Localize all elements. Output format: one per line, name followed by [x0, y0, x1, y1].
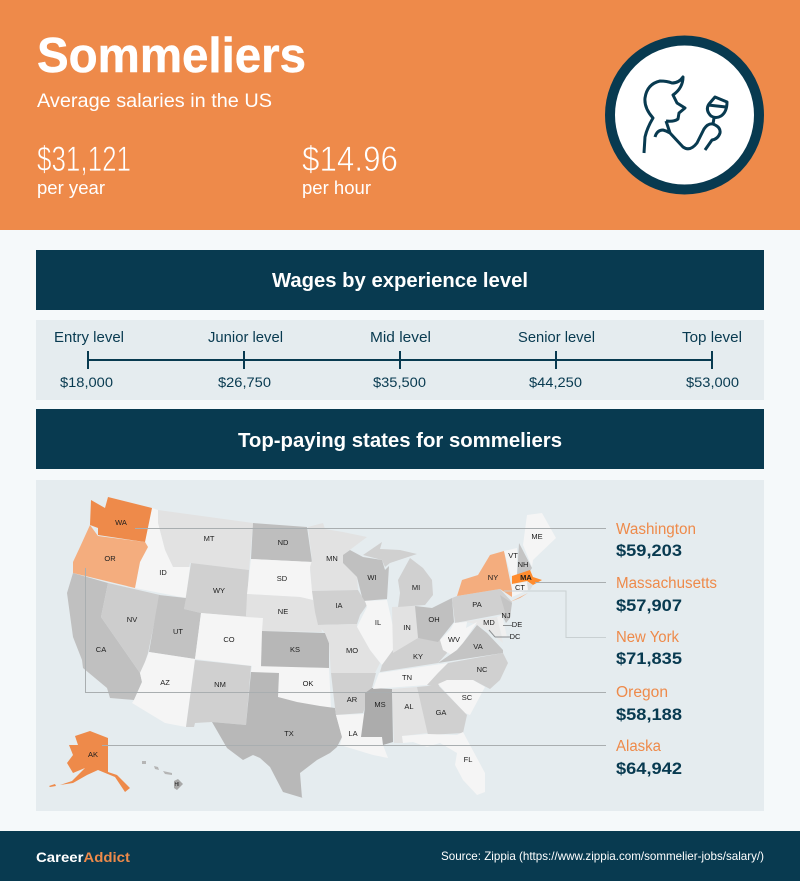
state salary: Oregon [616, 684, 682, 724]
state salary: New York: New York [616, 629, 679, 646]
heading bar: top-paying states [36, 409, 764, 469]
US state map [49, 497, 556, 798]
stat: yearly salary: $31,121 [37, 140, 131, 179]
state abbreviations: VT [508, 551, 518, 560]
state abbreviations: HI [174, 782, 180, 788]
state abbreviations: IN [403, 623, 411, 632]
timeline level labels: Mid level [370, 330, 431, 346]
state abbreviations: GA [436, 708, 446, 717]
state abbreviations: NY [488, 573, 498, 582]
state abbreviations: IL [375, 618, 381, 627]
timeline wage values [60, 375, 739, 390]
state abbreviations: MA [520, 573, 532, 582]
state abbreviations: MT [204, 534, 215, 543]
state salary: Alaska [616, 738, 682, 778]
state abbreviations: CO [223, 635, 235, 644]
state abbreviations: IA [335, 601, 343, 610]
state salary: Alaska: Alaska [616, 738, 661, 755]
state salary: Oregon: Oregon [616, 684, 668, 701]
state abbreviations: SC [462, 693, 473, 702]
state abbreviations: MO [346, 646, 358, 655]
state abbreviations: OH [428, 615, 440, 624]
panel: header [0, 0, 800, 230]
timeline level labels [54, 330, 742, 346]
state abbreviations: NV [127, 615, 137, 624]
state abbreviations: CA [96, 645, 106, 654]
state salary: Massachusetts: $57,907 [616, 597, 682, 615]
state abbreviations: UT [173, 627, 183, 636]
state abbreviations: NM [214, 680, 226, 689]
panel: footer [0, 831, 800, 881]
state salary: Massachusetts: Massachusetts [616, 575, 717, 592]
timeline level labels: Senior level [518, 330, 595, 346]
state abbreviations: WI [367, 573, 377, 582]
heading bar: wages by experience level [36, 250, 764, 310]
state salary: New York [616, 629, 682, 668]
stat: yearly salary [37, 140, 131, 198]
logo: CareerAddict: CareerAddict [36, 849, 130, 865]
state abbreviations: NH [518, 560, 528, 569]
connector lines [86, 528, 606, 746]
state abbreviations: CT [515, 583, 525, 592]
state abbreviations: AR [347, 695, 358, 704]
timeline level labels: Junior level [208, 330, 283, 346]
state salary: Oregon: $58,188 [616, 706, 682, 724]
state abbreviations: WY [213, 586, 225, 595]
state abbreviations: MS [374, 700, 386, 709]
state abbreviations: PA [472, 600, 482, 609]
state abbreviations: AK [88, 750, 98, 759]
heading bar: wages by experience level: Wages by experience level [272, 270, 528, 292]
state abbreviations: MI [412, 583, 420, 592]
state abbreviations: TN [402, 673, 412, 682]
panel: map of top-paying states [36, 480, 764, 811]
timeline wage values: $53,000 [686, 375, 739, 390]
icon: sommelier with wine glass [610, 40, 759, 190]
state abbreviations: OK [303, 679, 313, 688]
state abbreviations: NJ [501, 611, 511, 620]
stat: hourly salary: per hour [302, 178, 371, 198]
panel: experience timeline [36, 320, 764, 400]
state abbreviations: VA [473, 642, 483, 651]
state abbreviations: KS [290, 645, 300, 654]
timeline axis [88, 351, 712, 369]
state salary: Washington: $59,203 [616, 542, 682, 560]
state abbreviations: WA [115, 518, 127, 527]
state abbreviations: SD [277, 574, 288, 583]
state salary: Alaska: $64,942 [616, 760, 682, 778]
heading bar: top-paying states: Top-paying states for sommeliers [238, 430, 562, 452]
source: Source: Zippia (https://www.zippia.com/sommelier-jobs/salary/) [441, 849, 764, 863]
subtitle: Average salaries in the US [37, 91, 272, 112]
state salary: Washington: Washington [616, 521, 696, 538]
stat: hourly salary [302, 140, 398, 198]
state abbreviations: WV [448, 635, 460, 644]
state abbreviations: DC [510, 632, 521, 641]
stat: yearly salary: per year [37, 178, 105, 198]
state abbreviations [88, 518, 543, 788]
state abbreviations: FL [464, 755, 472, 764]
timeline wage values: $26,750 [218, 375, 271, 390]
state abbreviations: ID [159, 568, 167, 577]
state abbreviations: DE [512, 620, 522, 629]
state abbreviations: KY [413, 652, 423, 661]
state abbreviations: TX [284, 729, 294, 738]
state abbreviations: AL [404, 702, 414, 711]
state abbreviations: MD [483, 618, 495, 627]
state abbreviations: NC [477, 665, 488, 674]
state abbreviations: NE [278, 607, 288, 616]
state abbreviations: ME [531, 532, 543, 541]
state salary: Washington [616, 521, 696, 560]
state abbreviations: ND [278, 538, 289, 547]
state abbreviations: MN [326, 554, 338, 563]
timeline wage values: $35,500 [373, 375, 426, 390]
timeline wage values: $18,000 [60, 375, 113, 390]
title: Sommeliers [37, 29, 306, 83]
stat: hourly salary: $14.96 [302, 140, 398, 179]
state abbreviations: OR [104, 554, 116, 563]
timeline level labels: Entry level [54, 330, 124, 346]
timeline level labels: Top level [682, 330, 742, 346]
state abbreviations: LA [348, 729, 358, 738]
state salary: New York: $71,835 [616, 650, 682, 668]
state abbreviations: AZ [160, 678, 170, 687]
state salary: Massachusetts [616, 575, 717, 615]
timeline wage values: $44,250 [529, 375, 582, 390]
